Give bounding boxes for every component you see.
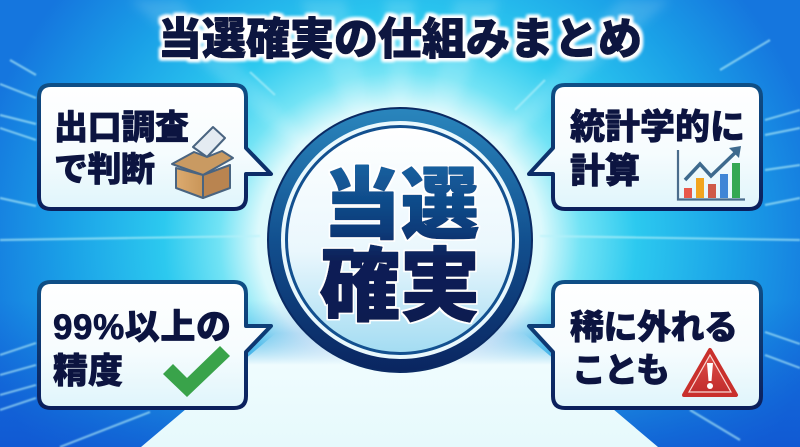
text: warning — [570, 309, 738, 390]
icon: check mark — [163, 346, 230, 397]
text: warning: 稀に外れる — [570, 309, 738, 347]
text: accuracy — [53, 308, 231, 391]
panel: exit poll — [39, 85, 271, 209]
icon: ballot box — [172, 127, 233, 198]
panel: statistics — [529, 85, 761, 209]
panel: accuracy — [39, 282, 271, 408]
emblem text: 当選 — [323, 161, 479, 249]
bubble outline — [39, 85, 271, 209]
floor highlight — [141, 333, 658, 447]
bubble outline — [39, 282, 271, 408]
icon: warning triangle — [684, 350, 736, 395]
emblem text — [320, 161, 480, 331]
bubble outline — [529, 282, 761, 408]
icon: growth chart — [678, 146, 745, 200]
panel: warning — [529, 282, 761, 408]
text: statistics: 計算 — [570, 152, 640, 191]
text: warning: ことも — [572, 352, 670, 390]
text: accuracy: 精度 — [53, 352, 123, 391]
emblem text: 確実 — [320, 242, 480, 331]
text: statistics: 統計学的に — [570, 108, 745, 147]
bubble outline — [529, 85, 761, 209]
center emblem — [268, 108, 532, 372]
text: statistics — [570, 108, 745, 191]
text: exit poll — [54, 109, 189, 189]
text: exit poll: 出口調査 — [54, 109, 189, 147]
text: accuracy: 99%以上の — [53, 308, 231, 347]
title: 当選確実の仕組みまとめ — [158, 15, 642, 64]
text: exit poll: で判断 — [54, 151, 155, 189]
